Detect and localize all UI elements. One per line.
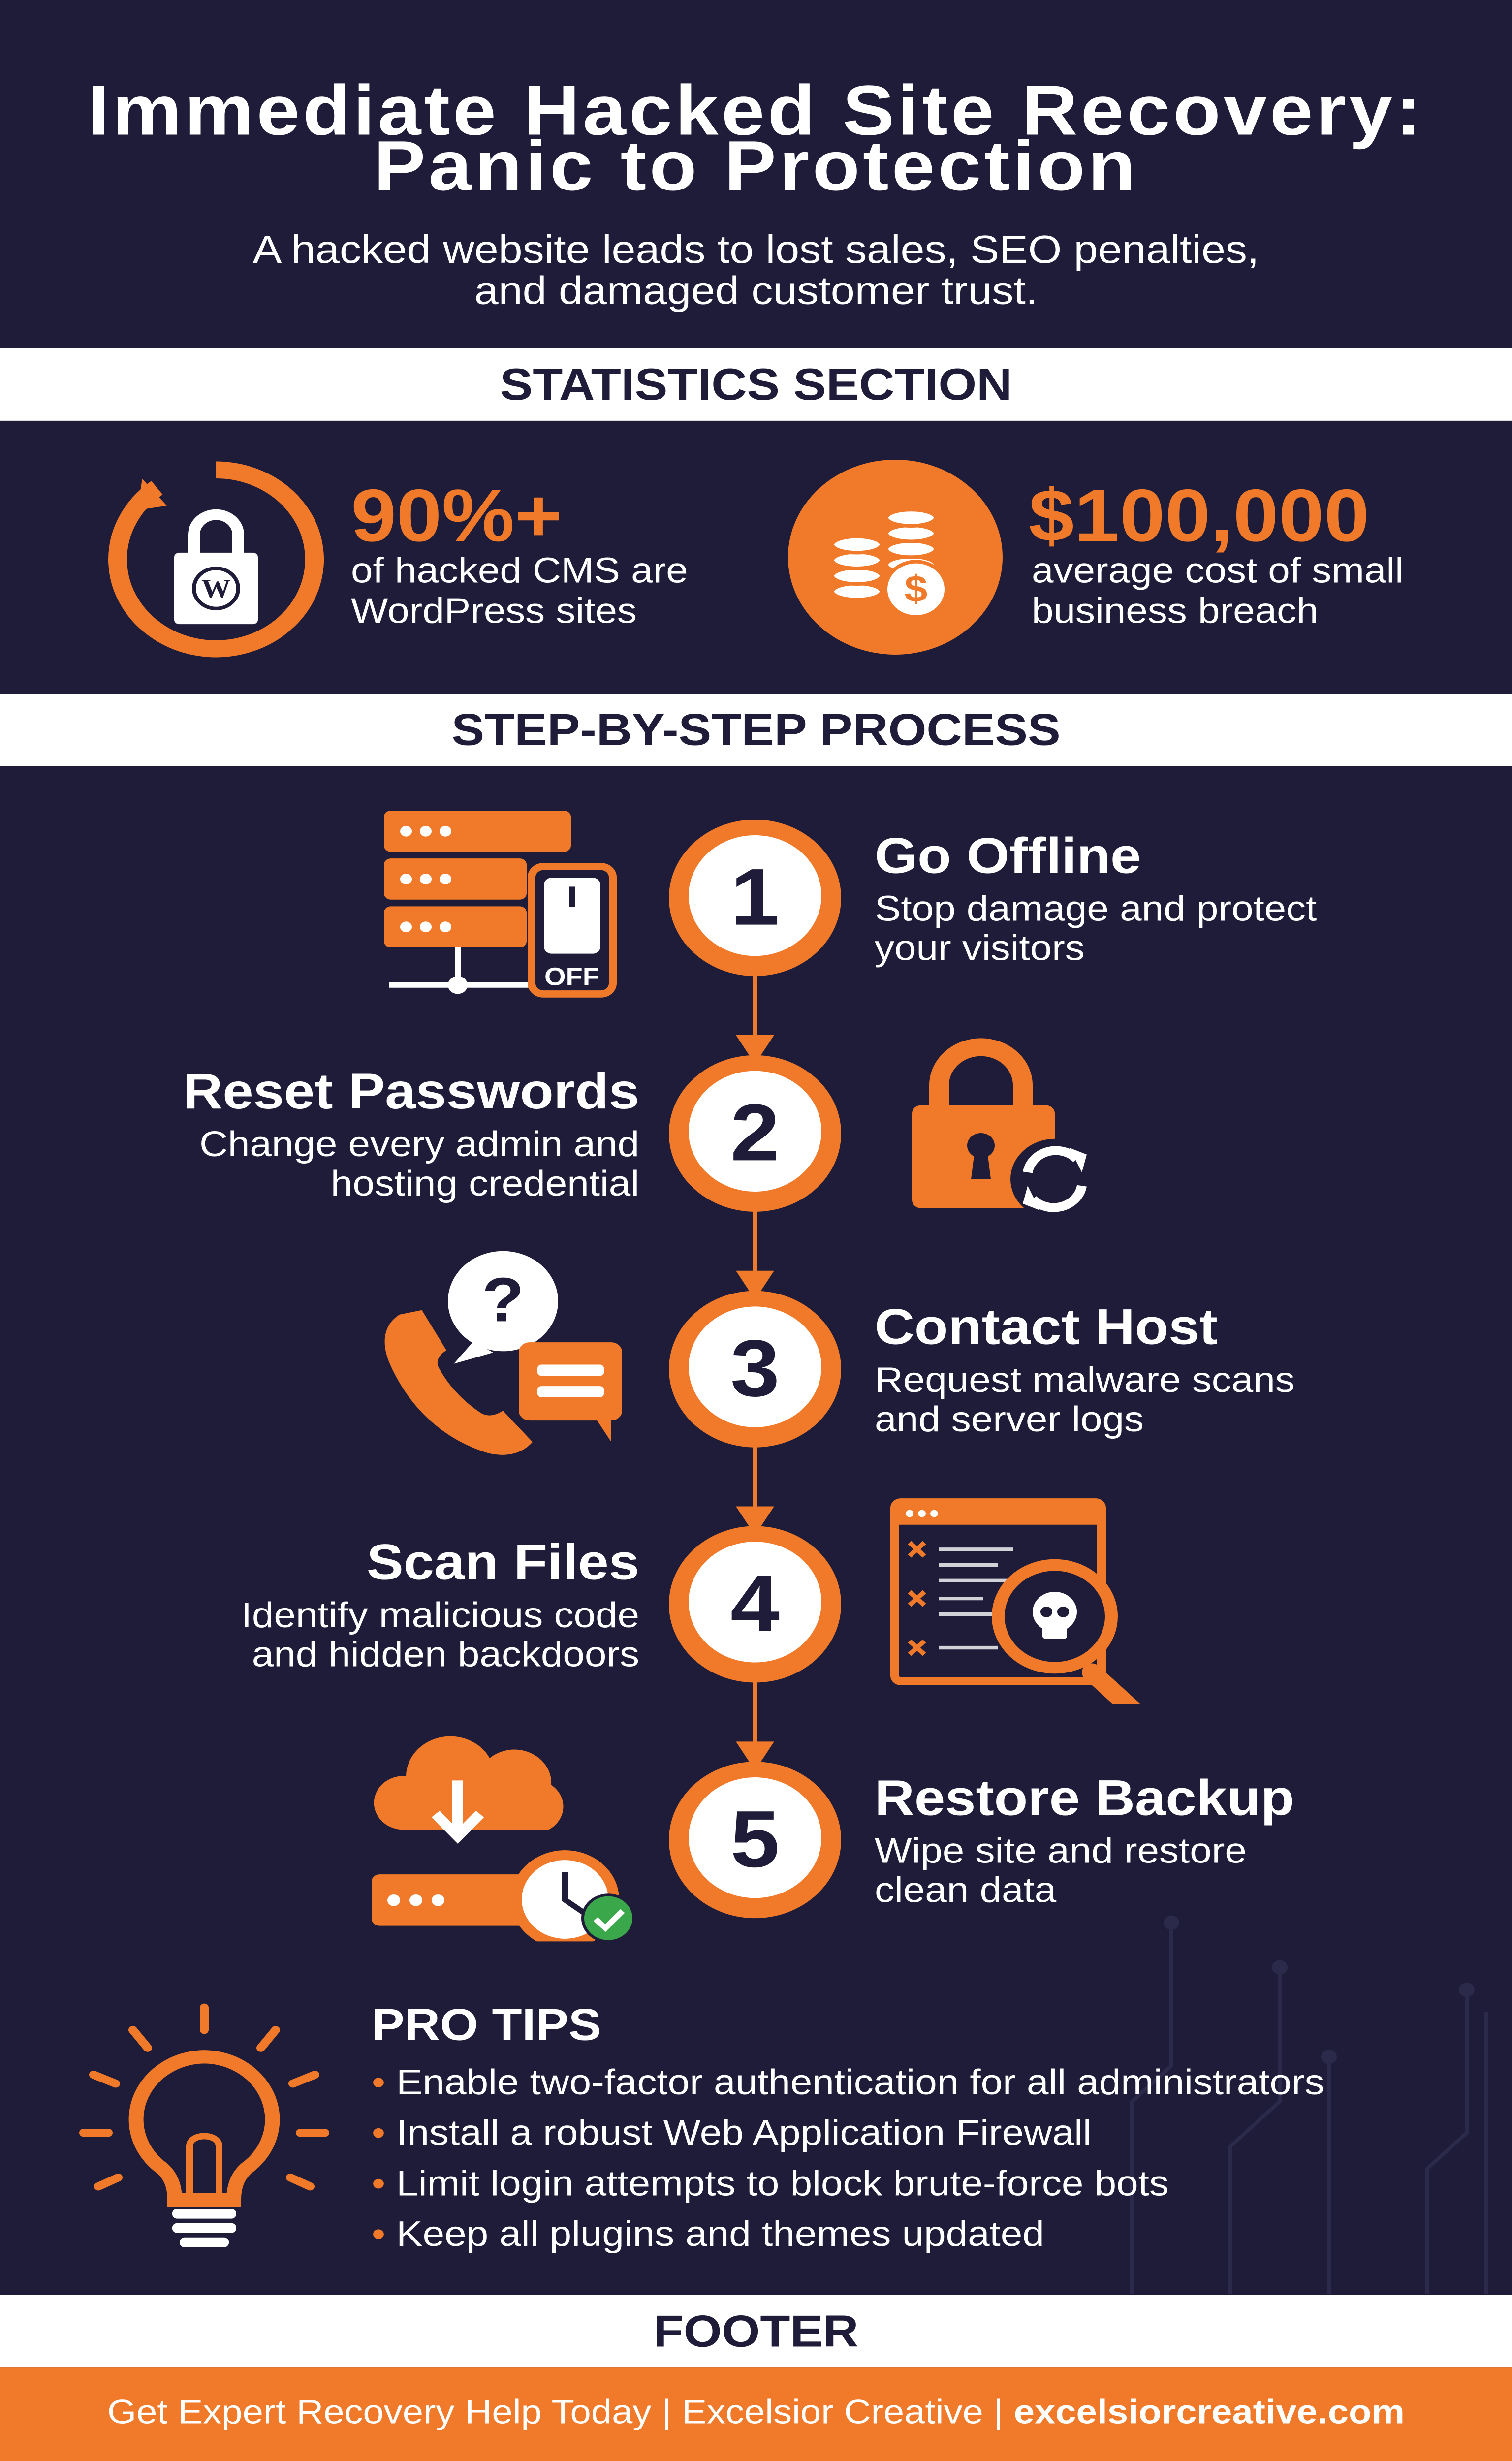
- subtitle: and damaged customer trust.: [474, 268, 1038, 313]
- step circles: 4: [730, 1559, 780, 1648]
- footer bar: Get Expert Recovery Help Today | Excelsior Creative | excelsiorcreative.com: [107, 2393, 1405, 2431]
- decorative circuit: [1130, 1916, 1488, 2294]
- panel: statistics: WordPress sites: [351, 591, 637, 631]
- title: [88, 71, 1424, 205]
- stat: 90%: 90%+: [351, 474, 562, 557]
- icon: server off: [384, 811, 617, 998]
- step 2 text: Change every admin and: [199, 1124, 639, 1164]
- icon: coins: $: [905, 568, 927, 610]
- step 2 text: hosting credential: [331, 1164, 639, 1203]
- step 3 text: Contact Host: [875, 1299, 1218, 1355]
- step 4 text: and hidden backdoors: [252, 1634, 639, 1674]
- band: footer heading: [0, 2295, 1512, 2367]
- step 3 text: and server logs: [875, 1399, 1144, 1439]
- subtitle: A hacked website leads to lost sales, SEO penalties,: [253, 227, 1259, 271]
- icon: server off: OFF: [544, 963, 599, 991]
- step circles: 5: [730, 1794, 780, 1884]
- step 1 text: your visitors: [875, 928, 1085, 968]
- step 5 text: Restore Backup: [875, 1770, 1294, 1826]
- step 4 text: Identify malicious code: [241, 1595, 639, 1635]
- step circles: [669, 820, 841, 1919]
- band: process heading: STEP-BY-STEP PROCESS: [451, 705, 1061, 755]
- title: Immediate Hacked Site Recovery:: [88, 71, 1424, 150]
- title: Panic to Protection: [374, 126, 1138, 205]
- step 5 text: clean data: [875, 1870, 1056, 1910]
- icon: code scan: [890, 1498, 1140, 1704]
- band: process heading: [0, 694, 1512, 766]
- icon: wordpress lock ring: W: [201, 574, 231, 603]
- step 3 text: [875, 1299, 1295, 1439]
- tips list: [372, 2057, 1324, 2259]
- tips list: • Limit login attempts to block brute-force bots: [372, 2163, 1169, 2203]
- pro tips heading: PRO TIPS: [372, 1999, 601, 2050]
- step 2 text: [183, 1063, 639, 1203]
- band: statistics heading: [0, 348, 1512, 421]
- step circles: 2: [730, 1088, 780, 1178]
- panel: statistics: average cost of small: [1032, 550, 1404, 590]
- step 5 text: [875, 1770, 1294, 1910]
- step 3 text: Request malware scans: [875, 1360, 1295, 1399]
- header: [0, 0, 1512, 349]
- panel: statistics: of hacked CMS are: [351, 550, 688, 590]
- panel: statistics: business breach: [1032, 591, 1319, 631]
- panel: pro tips: [74, 1985, 1452, 2253]
- step 4 text: [241, 1534, 639, 1674]
- footer bar: [0, 2367, 1512, 2461]
- icon: lock refresh: [912, 1038, 1087, 1212]
- band: statistics heading: STATISTICS SECTION: [500, 359, 1012, 410]
- step circles: 3: [730, 1324, 780, 1413]
- arrows: [736, 976, 774, 1762]
- panel: statistics: [108, 460, 1404, 658]
- step 4 text: Scan Files: [367, 1534, 639, 1590]
- icon: light bulb: [74, 2003, 335, 2253]
- step 5 text: Wipe site and restore: [875, 1830, 1247, 1870]
- stat: 100000: $100,000: [1029, 474, 1369, 557]
- tips list: • Keep all plugins and themes updated: [372, 2214, 1044, 2253]
- step circles: 1: [730, 852, 780, 942]
- step 1 text: Stop damage and protect: [875, 888, 1317, 928]
- icon: coins: [788, 460, 1003, 655]
- step 1 text: [875, 828, 1317, 968]
- tips list: • Install a robust Web Application Firewall: [372, 2113, 1092, 2152]
- icon: wordpress lock ring: [108, 462, 324, 658]
- tips list: • Enable two-factor authentication for all administrators: [372, 2062, 1324, 2102]
- icon: phone chat: [385, 1251, 622, 1455]
- step 2 text: Reset Passwords: [183, 1063, 639, 1119]
- band: footer heading: FOOTER: [654, 2306, 858, 2356]
- step 1 text: Go Offline: [875, 828, 1141, 883]
- subtitle: [253, 227, 1259, 313]
- icon: phone chat: ?: [482, 1265, 524, 1335]
- icon: cloud backup: [372, 1736, 632, 1941]
